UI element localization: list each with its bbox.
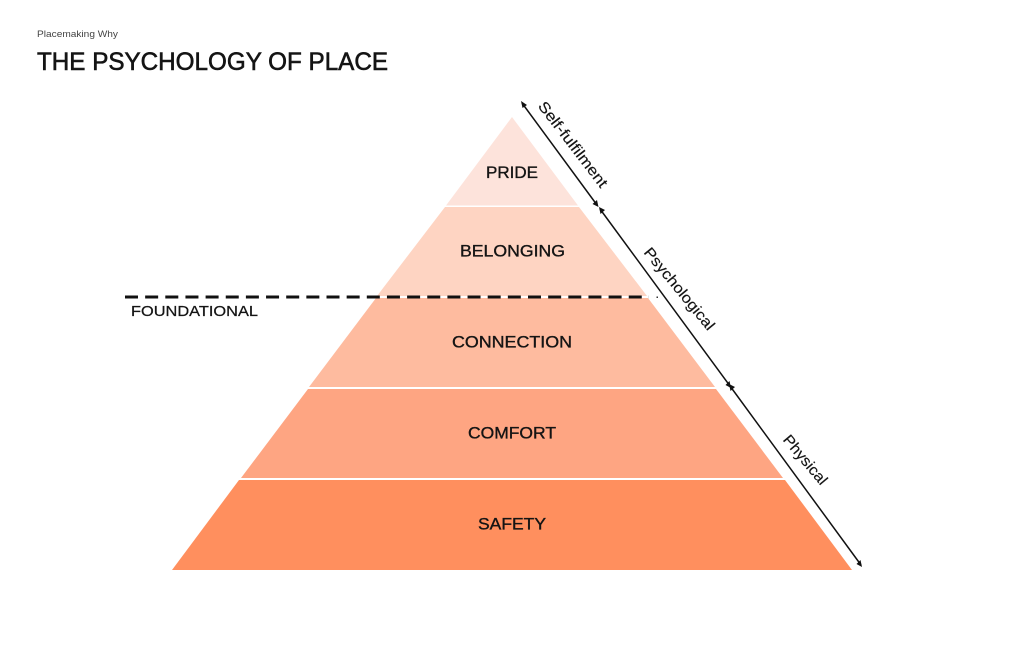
tier: comfort [241,389,783,478]
tier: safety [172,480,852,570]
tier: pride: PRIDE [486,164,538,182]
label: psychological: Psychological [640,244,718,334]
tier: pride [446,117,578,206]
tier: connection [309,298,715,387]
axis arrow: physical [729,384,862,567]
tier: belonging [377,207,647,296]
kicker text: Placemaking Why [37,29,118,40]
label: self-fulfilment: Self-fulfilment [534,98,612,192]
tier: comfort: COMFORT [468,424,556,442]
foundational dashed line [125,296,658,298]
tier: belonging: BELONGING [460,242,565,260]
axis arrow: psychological [599,207,731,388]
foundational label: FOUNDATIONAL [131,303,258,320]
axis arrow: self-fulfilment [521,101,598,207]
tier: safety: SAFETY [478,515,546,533]
pyramid [172,117,852,570]
tier: connection: CONNECTION [452,333,572,351]
label: physical: Physical [779,432,831,489]
title: THE PSYCHOLOGY OF PLACE [37,48,388,76]
